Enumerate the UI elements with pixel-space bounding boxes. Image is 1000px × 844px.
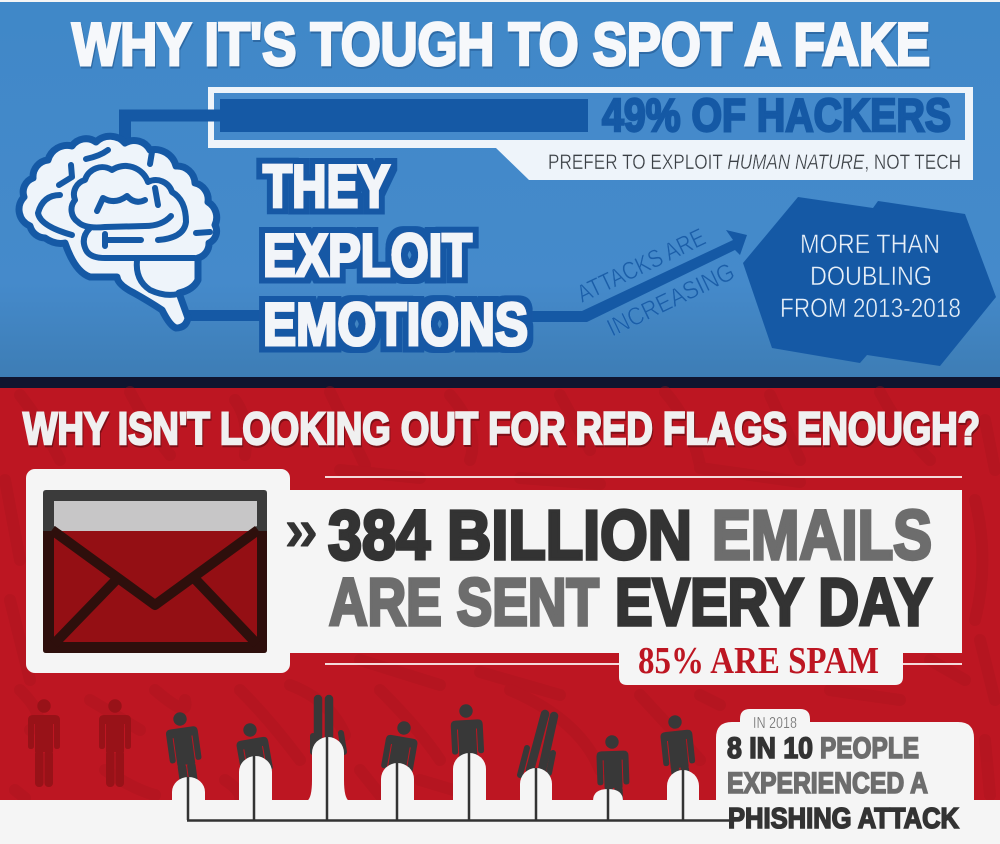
callout: more than doubling — [743, 197, 996, 366]
connector: bar to brain — [125, 116, 220, 142]
stat line two — [329, 565, 932, 640]
stat line one: EMAILS — [712, 496, 932, 574]
decorative rules — [325, 477, 962, 664]
callout: more than doubling: MORE THAN — [800, 229, 940, 259]
stat line two: EXPERIENCED A — [727, 767, 928, 800]
panel: blue section — [0, 2, 1000, 377]
stat line one: 8 IN 10 — [727, 732, 813, 765]
stat line two: ARE SENT — [329, 565, 599, 640]
heading: they exploit emotions: EXPLOIT — [263, 222, 472, 289]
callout: more than doubling: FROM 2013-2018 — [780, 293, 961, 323]
year label: IN 2018 — [753, 715, 797, 732]
icon: envelope — [43, 490, 267, 653]
chevrons: » — [284, 496, 318, 565]
panel: white footer with tabs — [0, 737, 1000, 844]
panel: email stat — [26, 469, 962, 685]
people: unaffected — [28, 699, 131, 787]
stat line one: PEOPLE — [820, 732, 919, 765]
arrow label: attacks are: ATTACKS ARE — [572, 223, 710, 308]
panel: phishing stat — [716, 709, 974, 835]
spam callout: 85% ARE SPAM — [638, 640, 879, 682]
arrow label: increasing: INCREASING — [602, 258, 739, 342]
stat line one — [727, 732, 919, 765]
panel: red section — [0, 388, 1000, 824]
stat caption: PREFER TO EXPLOIT HUMAN NATURE, NOT TECH — [548, 150, 961, 174]
connector lines to people — [187, 737, 730, 820]
heading: they exploit emotions — [263, 153, 528, 358]
callout: more than doubling: DOUBLING — [810, 261, 932, 291]
stat line two: EVERY DAY — [615, 565, 932, 640]
progress bar — [220, 99, 588, 132]
people: phished — [163, 699, 699, 824]
stat box: 49% of hackers — [208, 87, 973, 180]
stat line one: 384 BILLION — [328, 496, 692, 574]
stat line three: PHISHING ATTACK — [728, 803, 959, 835]
divider band — [0, 377, 1000, 388]
stat line one — [328, 496, 932, 574]
connector and arrow: brain to hexagon — [186, 230, 747, 322]
heading: they exploit emotions: THEY — [263, 153, 390, 220]
heading: they exploit emotions: EMOTIONS — [263, 291, 528, 358]
icon: brain — [19, 136, 217, 328]
stat headline: 49% OF HACKERS — [602, 89, 951, 141]
